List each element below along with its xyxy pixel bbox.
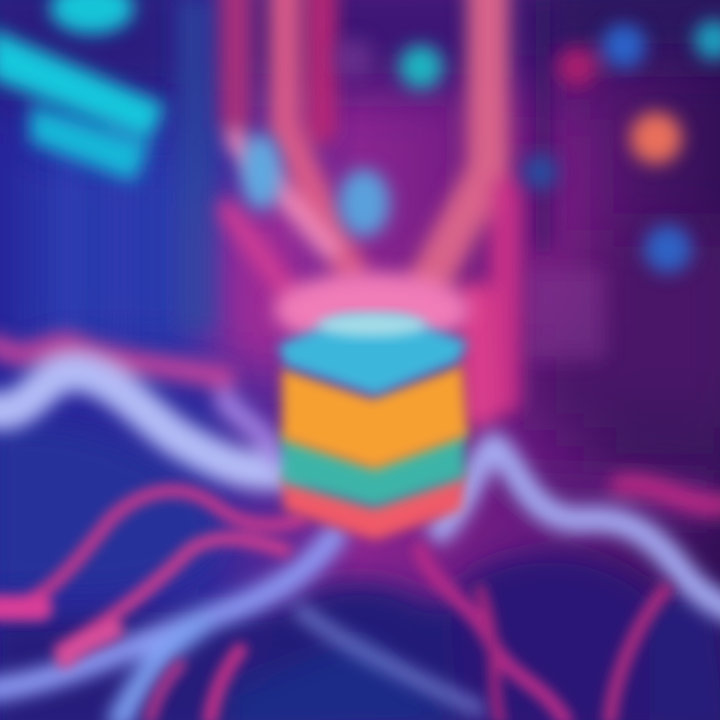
vertical light bars [60,0,605,360]
lower dark hills [0,426,720,720]
stack layer: cyan top [278,318,468,396]
pink data streams [228,0,505,410]
chart line: pale blue wave [0,343,720,720]
icon: blue diamonds [241,134,390,237]
stack layer: teal [282,428,465,508]
chart line: magenta wave [0,491,665,720]
stack highlight [317,313,427,337]
icon: cyan bars top left [0,0,165,182]
stack layer: coral [282,470,465,540]
icon: floating data dots [333,20,720,273]
stack layer: orange [282,365,468,470]
stack top glow [274,272,470,348]
panel: background glow [0,0,720,470]
icon: layered data stack [274,272,470,540]
